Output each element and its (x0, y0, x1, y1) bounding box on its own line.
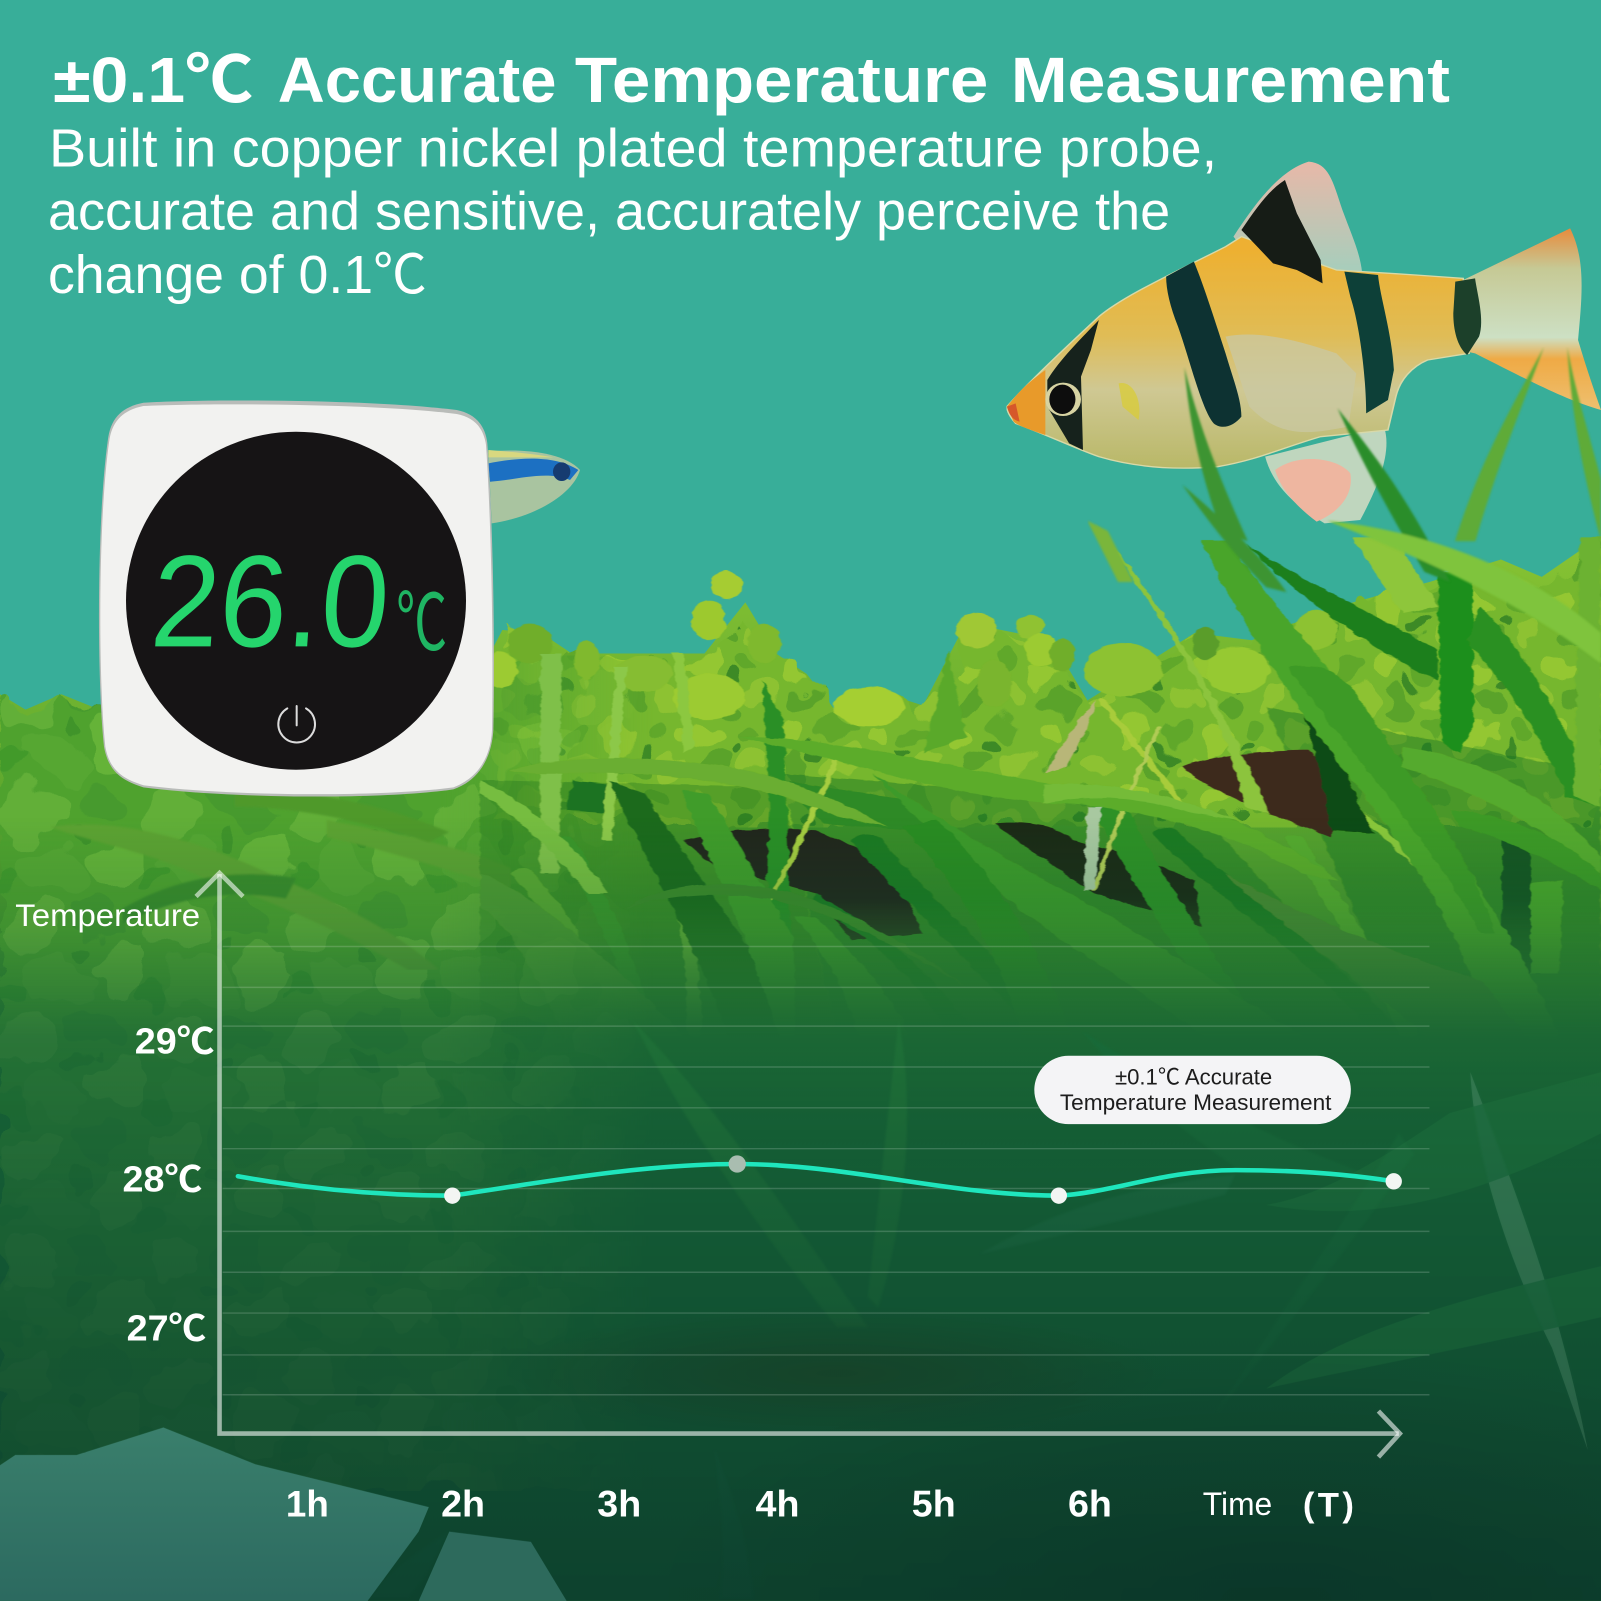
y axis labels: 27℃ (127, 1309, 206, 1349)
title: Accurate (278, 44, 556, 116)
x axis labels: 1h (286, 1483, 329, 1524)
thermometer device (99, 400, 494, 797)
y axis labels (123, 1022, 214, 1349)
x axis title: Time (1203, 1485, 1272, 1522)
thin blades near the big fish (1087, 347, 1601, 664)
x axis title: (T) (1303, 1486, 1354, 1524)
temperature curve (238, 1164, 1394, 1196)
plant mass silhouette (0, 536, 1601, 1601)
stones at bottom left (0, 1427, 567, 1601)
brown rocks (1180, 750, 1345, 837)
lower faded blades (370, 1021, 1588, 1599)
callout pill: Temperature Measurement (1060, 1090, 1331, 1115)
lettuce leaves on the left (0, 656, 629, 1430)
tiger barb fish (1007, 162, 1601, 523)
x axis labels: 4h (756, 1483, 799, 1524)
description text (48, 118, 1217, 305)
title: Temperature (575, 44, 988, 116)
x axis labels: 5h (912, 1483, 956, 1524)
round black display (126, 432, 466, 770)
dark shaded floor and driftwood (500, 1297, 1601, 1601)
y axis labels: 29℃ (135, 1022, 214, 1062)
grid lines (223, 947, 1429, 1395)
faded blade overlays on the dark area (1266, 1072, 1601, 1450)
x axis title (1203, 1485, 1354, 1524)
device body (99, 400, 494, 797)
foreground grass blades (480, 523, 1601, 1040)
vertical stems (541, 653, 562, 874)
description text: accurate and sensitive, accurately perceive the (48, 182, 1170, 242)
y axis labels: 28℃ (123, 1160, 202, 1200)
olive sweeping blades on the left (50, 791, 511, 970)
power button icon (278, 706, 315, 742)
x axis labels: 2h (441, 1483, 485, 1524)
long diagonal blades (608, 780, 755, 972)
celsius unit: ℃ (396, 580, 447, 666)
callout pill: ±0.1℃ Accurate (1115, 1064, 1272, 1089)
x axis labels: 3h (597, 1483, 641, 1524)
thin streak blades (510, 698, 1413, 999)
x axis labels: 6h (1068, 1483, 1112, 1524)
deep shadow gaps (478, 708, 1601, 958)
temperature line chart (15, 873, 1429, 1524)
description text: change of 0.1℃ (48, 245, 427, 305)
data points (444, 1155, 1402, 1204)
callout pill (1034, 1056, 1351, 1124)
y axis title: Temperature (15, 897, 200, 933)
hedge texture across the plant line (490, 541, 1601, 827)
temperature reading: 26.0 (147, 528, 394, 674)
description text: Built in copper nickel plated temperature probe, (49, 118, 1217, 178)
title (53, 44, 1450, 116)
title: ±0.1℃ (53, 44, 253, 116)
neon tetra fish behind the device (488, 450, 580, 523)
x axis labels (286, 1483, 1112, 1524)
sweeping arc blades (508, 758, 887, 827)
title: Measurement (1011, 44, 1450, 116)
aquatic plants (0, 347, 1601, 1601)
axes with arrows (196, 873, 1400, 1457)
hedge leaves (486, 571, 1338, 727)
big right blades (1245, 543, 1438, 680)
dark gradient overlay over lower scene (0, 817, 1601, 1601)
